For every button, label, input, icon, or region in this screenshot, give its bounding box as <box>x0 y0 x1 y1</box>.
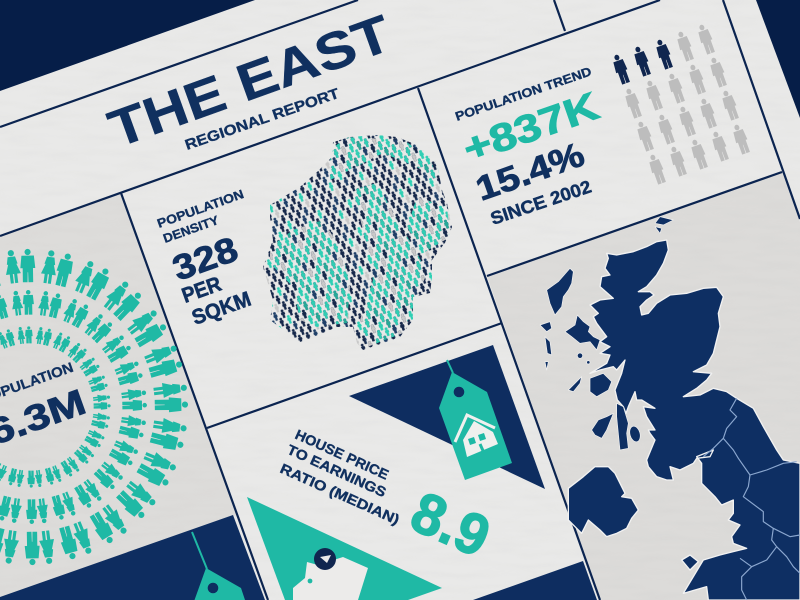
title: THE EAST <box>101 5 399 159</box>
map: region boundaries <box>703 398 800 600</box>
pictogram: population trend people <box>610 23 752 185</box>
text: population trend <box>453 65 604 229</box>
density map of people <box>263 135 452 350</box>
map: Scottish islands and peninsulas <box>540 217 673 450</box>
text: house price ratio: TO EARNINGS <box>285 441 389 500</box>
text: house price ratio <box>278 426 402 528</box>
map: Anglesey <box>682 555 698 570</box>
text: population density: 328 <box>168 230 243 289</box>
navy triangle <box>349 345 545 489</box>
text: house price ratio: HOUSE PRICE <box>293 426 391 483</box>
text: population trend: SINCE 2002 <box>488 177 594 229</box>
value: 8.9: 8.9 <box>402 479 499 570</box>
panel: map background <box>487 172 800 600</box>
panel: navy bottom left <box>0 515 265 600</box>
text: population trend: POPULATION TREND <box>453 65 593 124</box>
Scotland and England mainland <box>590 240 800 600</box>
text: population density: SQKM <box>189 288 254 330</box>
text: house price ratio: RATIO (MEDIAN) <box>278 460 402 528</box>
text: population density <box>155 187 254 330</box>
map: Northern Ireland <box>568 467 638 537</box>
subtitle: REGIONAL REPORT <box>183 86 342 154</box>
text: population trend: 15.4% <box>471 136 589 209</box>
panel: population ring background <box>0 193 237 597</box>
text: population total <box>0 359 91 453</box>
icon: house <box>455 415 498 457</box>
icon: house price tag <box>439 360 512 480</box>
text: population density: PER <box>179 273 224 308</box>
icon: piggy bank <box>293 548 368 600</box>
map: UK regions <box>590 240 800 600</box>
icon: lower price tag <box>192 532 245 600</box>
text: population density: DENSITY <box>161 213 221 246</box>
population ring chart <box>0 248 189 566</box>
text: population trend: +837K <box>458 85 604 171</box>
teal triangle with piggy bank <box>247 497 442 600</box>
panel: navy bottom centre <box>473 561 597 600</box>
text: population density: POPULATION <box>155 187 246 231</box>
